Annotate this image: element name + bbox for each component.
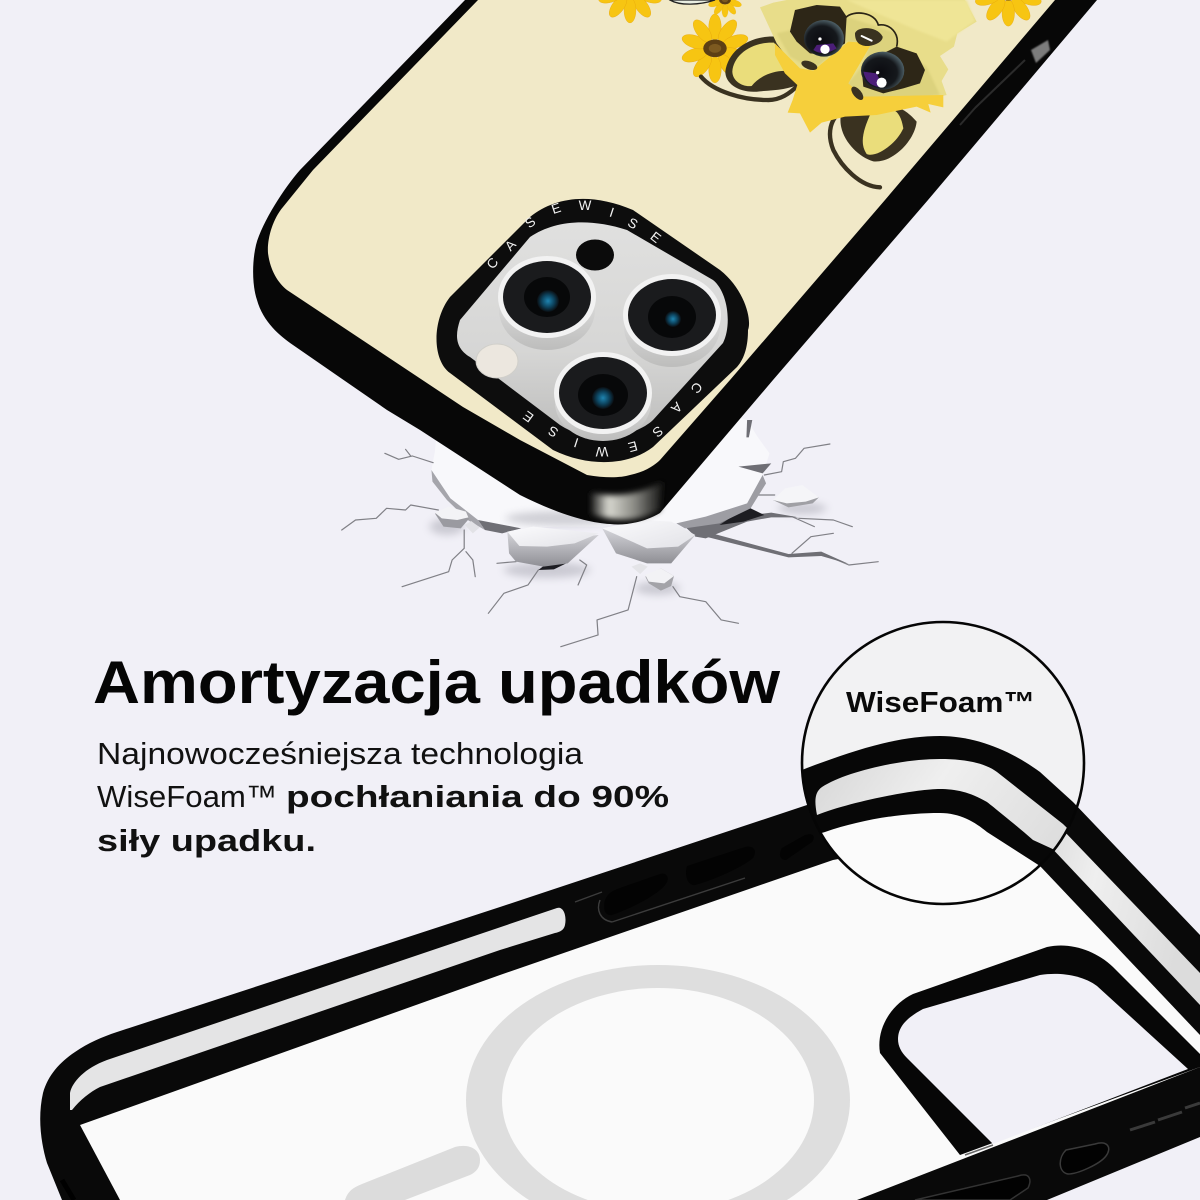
magnetic ring [466,965,850,1200]
fragment: left large [507,527,599,567]
lower antenna [830,109,880,187]
bumper outer [40,790,1200,1200]
title: Amortyzacja upadków [93,649,780,716]
crack wedges [478,420,849,564]
right slab edge [676,475,766,528]
eye patches [790,5,925,93]
left ear [725,37,800,92]
left slab edge [431,470,485,530]
rim highlight at corner [590,480,664,520]
ring lettering: C [483,255,501,272]
description text [97,736,669,858]
lower edge details [62,1103,1200,1200]
left antenna [701,77,798,100]
ring lettering: S [650,423,666,440]
lens one [498,256,596,350]
ground shadows [430,502,826,595]
eye left [804,20,844,57]
ring lettering: E [648,229,664,246]
fur pale [760,0,977,107]
case back, cream [268,0,1055,477]
clear band left [70,908,566,1110]
phone with yellow case, top [253,0,1097,525]
bottom pill mark [345,1146,480,1200]
ring lettering: I [572,435,580,450]
clear case with black bumper, bottom [40,790,1200,1200]
crack lines [342,444,878,647]
illustration: cracked ground impact [342,400,878,647]
ring lettering [483,198,706,459]
clear band right [1030,806,1200,1005]
dark crack holes [538,507,764,570]
eyebrow lines [846,13,897,47]
side button highlight [1031,40,1050,63]
raised ground slab [431,400,770,528]
zoom circle label: WiseFoam™ [846,687,1035,719]
eye right [861,52,904,90]
wing fragment [670,0,715,4]
ring lettering: E [627,438,639,455]
ring lettering: W [595,444,608,459]
fragment: small left [435,507,480,533]
zoom circle: magnified bumper detail [800,620,1086,906]
zoom circle fill [802,622,1084,904]
camera surround with CASEWISE ring [436,198,749,462]
character art: bee creature and flowers [597,0,1043,187]
interior [80,840,1200,1200]
fur orange [775,42,943,133]
ring lettering: I [608,205,616,220]
microphone [576,240,614,270]
ring lettering: E [550,200,563,217]
fragment: small right [773,485,819,507]
small marks [800,59,866,102]
ring lettering: W [579,198,592,213]
fragment: centre large [602,520,695,563]
case outer rim [253,0,1097,525]
ring lettering: A [668,399,685,416]
lower ear [840,107,917,161]
fragment: small bottom [632,563,674,591]
flowers [597,0,1043,83]
lens three [554,352,652,441]
ring lettering: E [520,408,536,425]
description text: siły upadku. [97,823,316,858]
cheek tone [777,17,940,103]
button area [575,834,814,922]
ring lettering: S [522,214,538,231]
ring lettering: S [546,423,561,440]
ring lettering: A [502,237,519,254]
lens two [623,274,721,367]
camera cutout [879,946,1200,1155]
description text: Najnowocześniejsza technologia [97,736,584,771]
flash [476,344,518,378]
camera plate [457,222,728,437]
ring lettering: C [688,379,706,396]
camera bumper [436,199,749,462]
magnified content [803,736,1076,902]
description text: WiseFoam™ [97,779,277,814]
zoom circle outline [802,622,1084,904]
nose [855,28,883,46]
ring lettering: S [625,215,640,232]
description text: pochłaniania do 90% [286,779,669,814]
